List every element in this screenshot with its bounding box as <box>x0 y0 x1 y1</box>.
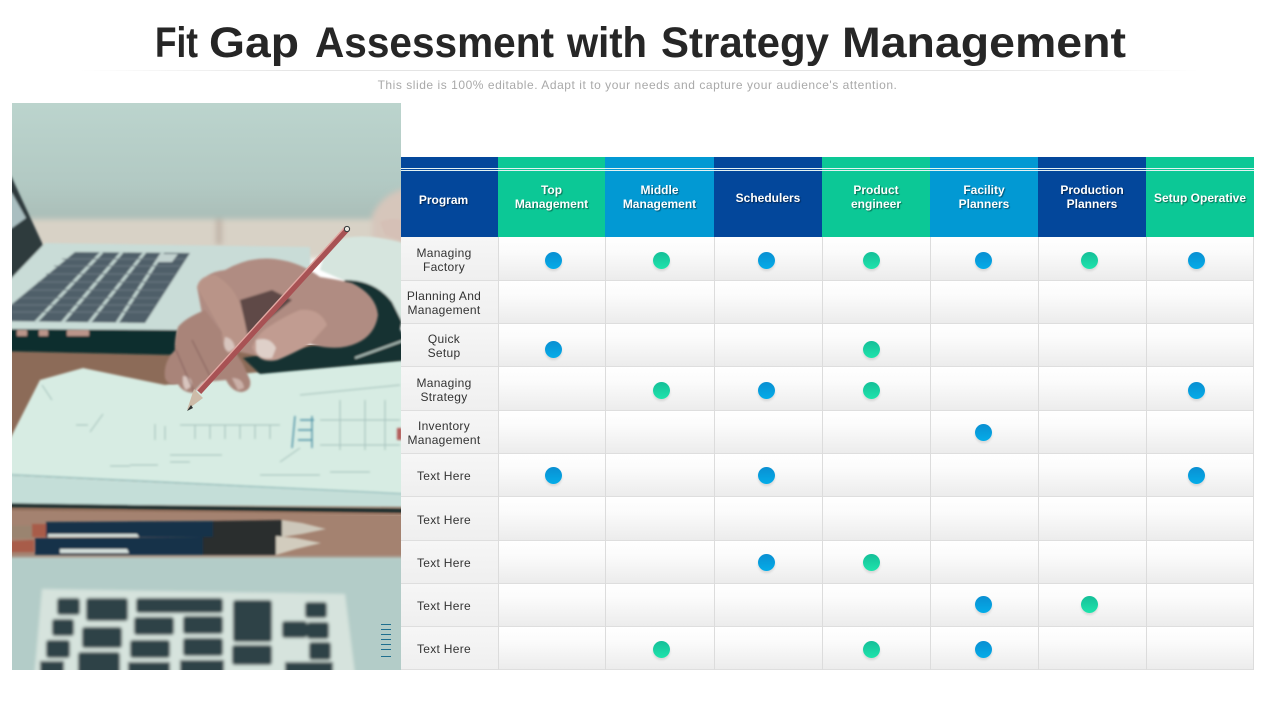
header: Facility Planners: Planners <box>959 197 1009 211</box>
row: Text Here 3 <box>401 541 1254 584</box>
header: Program <box>401 157 498 237</box>
row: Planning And Management: Management <box>407 303 481 317</box>
wood table <box>0 345 420 515</box>
row: Inventory Management: Inventory <box>418 419 470 433</box>
header: Production Planners: Planners <box>1067 197 1117 211</box>
laptop <box>0 160 312 355</box>
header: Schedulers <box>714 157 822 237</box>
row: Text Here 2: Text Here <box>417 512 471 526</box>
header: Middle Management: Middle <box>640 183 678 197</box>
title: Gap <box>209 19 299 67</box>
foreground keyboard <box>0 557 420 690</box>
row: Text Here 2 <box>401 497 1254 541</box>
row: Managing Strategy: Strategy <box>420 390 468 404</box>
row: Text Here 5 <box>401 627 1254 670</box>
header: Middle Management <box>605 157 714 237</box>
handwritten notes <box>42 385 402 475</box>
hand <box>165 258 378 393</box>
title: with <box>566 19 647 67</box>
row: Planning And Management <box>401 281 1254 324</box>
row: Text Here 1 <box>401 454 1254 497</box>
row: Quick Setup: Quick <box>428 332 460 346</box>
header: Middle Management: Management <box>623 197 696 211</box>
fit gap table <box>401 157 1254 670</box>
row: Planning And Management: Planning And <box>407 289 481 303</box>
header: Top Management: Top <box>541 183 562 197</box>
paper stack <box>0 359 410 560</box>
row: Quick Setup: Setup <box>428 346 460 360</box>
row: Managing Factory: Managing <box>416 246 472 260</box>
pens <box>0 520 326 555</box>
blurred background sofa <box>0 188 420 259</box>
header: Facility Planners: Facility <box>963 183 1005 197</box>
row: Text Here 4 <box>401 584 1254 627</box>
photo: hand writing on paper beside laptop <box>12 103 401 670</box>
row: Quick Setup <box>401 324 1254 367</box>
header: Production Planners <box>1038 157 1146 237</box>
row: Managing Strategy <box>401 367 1254 411</box>
title: Strategy <box>661 19 829 67</box>
row: Text Here 1: Text Here <box>417 469 471 483</box>
pencil <box>187 226 350 411</box>
header: Product engineer: engineer <box>851 197 901 211</box>
header: Product engineer: Product <box>853 183 899 197</box>
header: Product engineer <box>822 157 930 237</box>
row: Inventory Management: Management <box>407 433 481 447</box>
row: Managing Factory: Factory <box>423 260 465 274</box>
title: Assessment <box>315 19 554 67</box>
header: Facility Planners <box>930 157 1038 237</box>
dark cuff and white sleeve <box>243 219 410 374</box>
row: Text Here 5: Text Here <box>417 642 471 656</box>
header: Top Management: Management <box>515 197 588 211</box>
title: Management <box>842 19 1126 67</box>
header: Setup Operative: Setup Operative <box>1154 191 1246 205</box>
header: Setup Operative <box>1146 157 1254 237</box>
subtitle: This slide is 100% editable. Adapt it to your needs and capture your audience's attention. <box>378 78 897 92</box>
title <box>155 19 1126 67</box>
header: Top Management <box>498 157 605 237</box>
icon: striped marker <box>381 624 391 656</box>
row: Managing Factory <box>401 237 1254 281</box>
title: Fit <box>155 19 198 67</box>
header: Schedulers: Schedulers <box>736 191 800 205</box>
header: Program: Program <box>419 193 468 207</box>
row: Text Here 4: Text Here <box>417 599 471 613</box>
row: Managing Strategy: Managing <box>416 376 472 390</box>
row: Inventory Management <box>401 411 1254 454</box>
row: Text Here 3: Text Here <box>417 556 471 570</box>
header: Production Planners: Production <box>1060 183 1124 197</box>
